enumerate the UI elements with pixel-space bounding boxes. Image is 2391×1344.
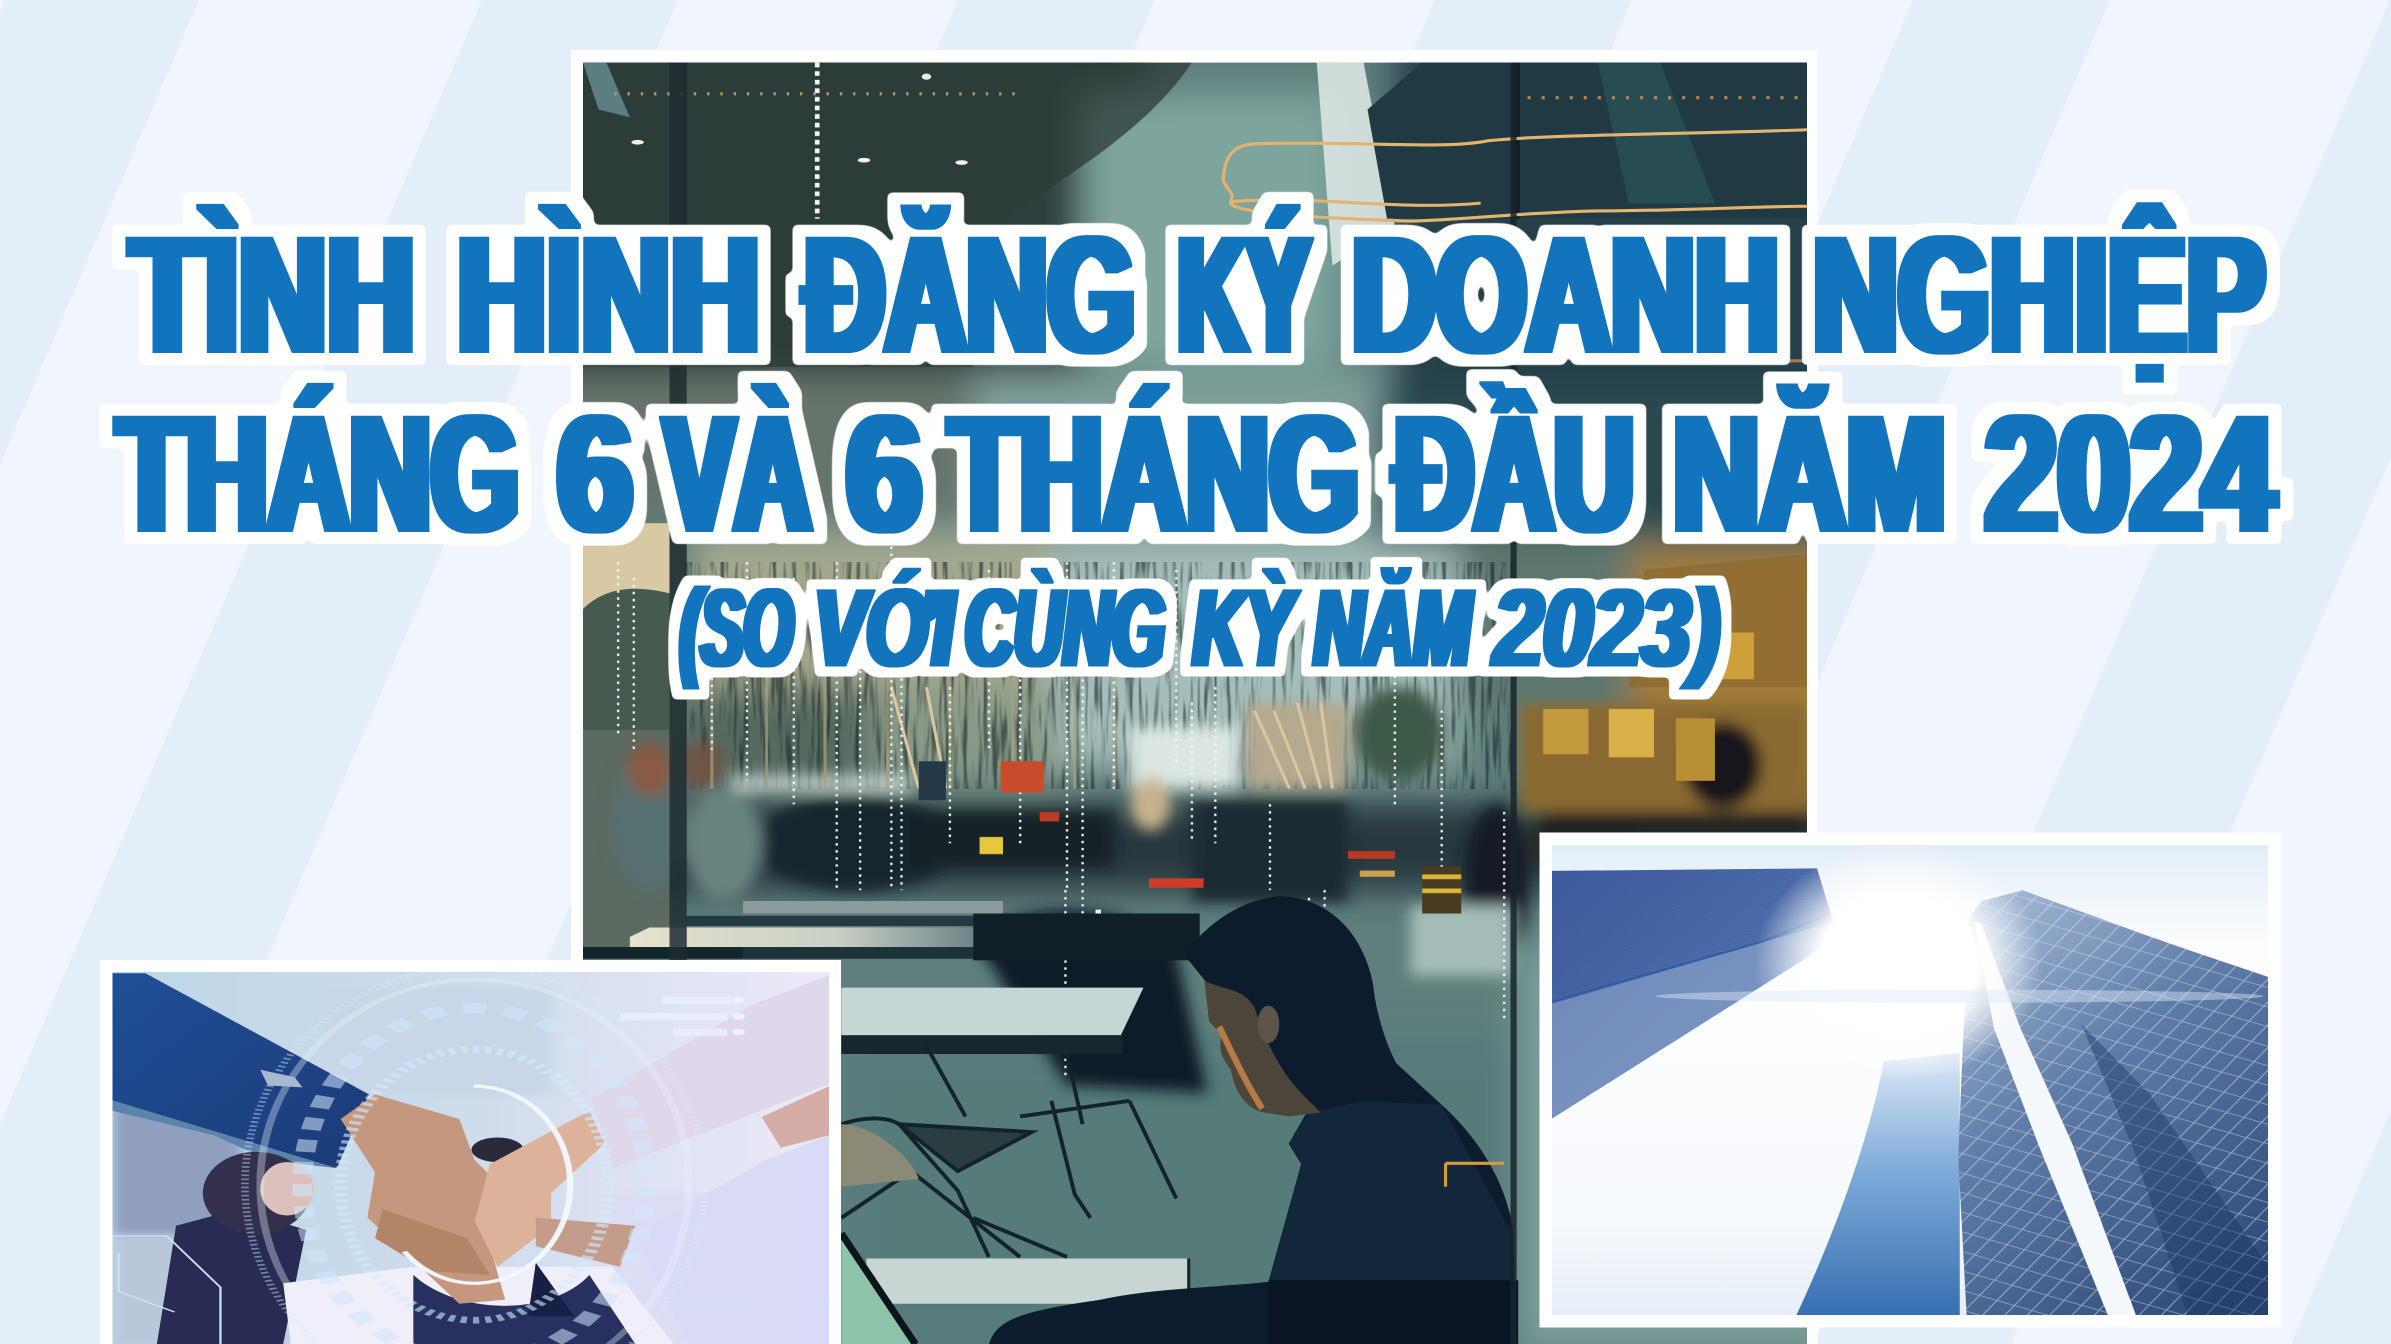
panel: main photo xyxy=(536,16,1863,1344)
title line 1: HÌNH xyxy=(457,203,760,388)
joined fists xyxy=(341,1094,635,1304)
subtitle: (SO xyxy=(680,567,793,690)
subtitle xyxy=(680,567,1720,690)
shirt on the right xyxy=(635,1086,829,1344)
title line 1: KÝ xyxy=(1178,203,1310,388)
sky and tree at left of the pillar xyxy=(583,523,670,953)
shop lights and signs xyxy=(919,761,1461,913)
woman in dark jacket xyxy=(157,1152,314,1344)
golden light trails xyxy=(1223,130,1807,361)
curved dark structure edge and pale column xyxy=(583,63,1807,367)
glass pillars xyxy=(670,63,1517,1344)
title line 2: 6 xyxy=(557,382,633,567)
center tower xyxy=(1796,1053,1960,1315)
skyscraper photo: towers looking up into the sun xyxy=(1552,845,2268,1315)
subtitle: KỲ xyxy=(1193,567,1299,690)
subtitle: VỚI xyxy=(814,567,956,690)
left tower xyxy=(1552,868,1838,1119)
man behind fists xyxy=(283,1137,674,1344)
title line 2: 6 xyxy=(846,382,922,567)
teamwork photo white frame xyxy=(100,960,841,1344)
panel: teamwork photo xyxy=(100,960,841,1344)
title line 2: NĂM xyxy=(1673,382,1946,567)
HUD rings xyxy=(245,967,704,1344)
left navy sleeve xyxy=(112,973,369,1168)
title line 2 xyxy=(117,382,2275,567)
title line 1 xyxy=(130,203,2265,388)
right pale sleeve xyxy=(591,975,829,1168)
title xyxy=(117,203,2275,690)
hanging foliage texture xyxy=(684,562,1512,789)
sun glow xyxy=(1656,843,2263,1082)
digital rain dotted lines xyxy=(618,63,1504,1109)
table tops xyxy=(841,988,1190,1305)
skyscraper photo white frame xyxy=(1540,832,2281,1328)
golden window panels xyxy=(1543,554,1807,781)
title line 2: 2024 xyxy=(1985,382,2275,567)
HUD bars xyxy=(260,997,745,1087)
hanging foliage strands xyxy=(712,593,1332,789)
title line 2: THÁNG xyxy=(949,382,1359,567)
chairs xyxy=(841,1046,1176,1257)
title line 1: ĐĂNG xyxy=(804,203,1135,388)
title line 1: TÌNH xyxy=(130,203,415,388)
main photo: office scene with reflections xyxy=(583,62,2234,1344)
right tower xyxy=(1958,890,2268,1315)
horizontal glass reflection bars xyxy=(583,901,1200,960)
subtitle: NĂM xyxy=(1314,567,1472,690)
title line 2: THÁNG xyxy=(117,382,519,567)
man at the laptop, silhouette xyxy=(989,896,1518,1344)
title line 2: VÀ xyxy=(664,382,811,567)
laptop in foreground xyxy=(841,1234,916,1344)
subtitle: CÙNG xyxy=(965,567,1165,690)
HUD corner lines xyxy=(112,1236,829,1344)
title line 2: ĐẦU xyxy=(1394,382,1634,567)
panel: skyscraper photo xyxy=(1540,832,2281,1328)
subtitle: 2023) xyxy=(1492,567,1720,690)
main photo white frame xyxy=(571,50,1818,1344)
teamwork photo: joined fists with HUD rings xyxy=(112,972,829,1344)
ceiling lights xyxy=(631,74,968,165)
title line 1: DOANH xyxy=(1352,203,1779,388)
